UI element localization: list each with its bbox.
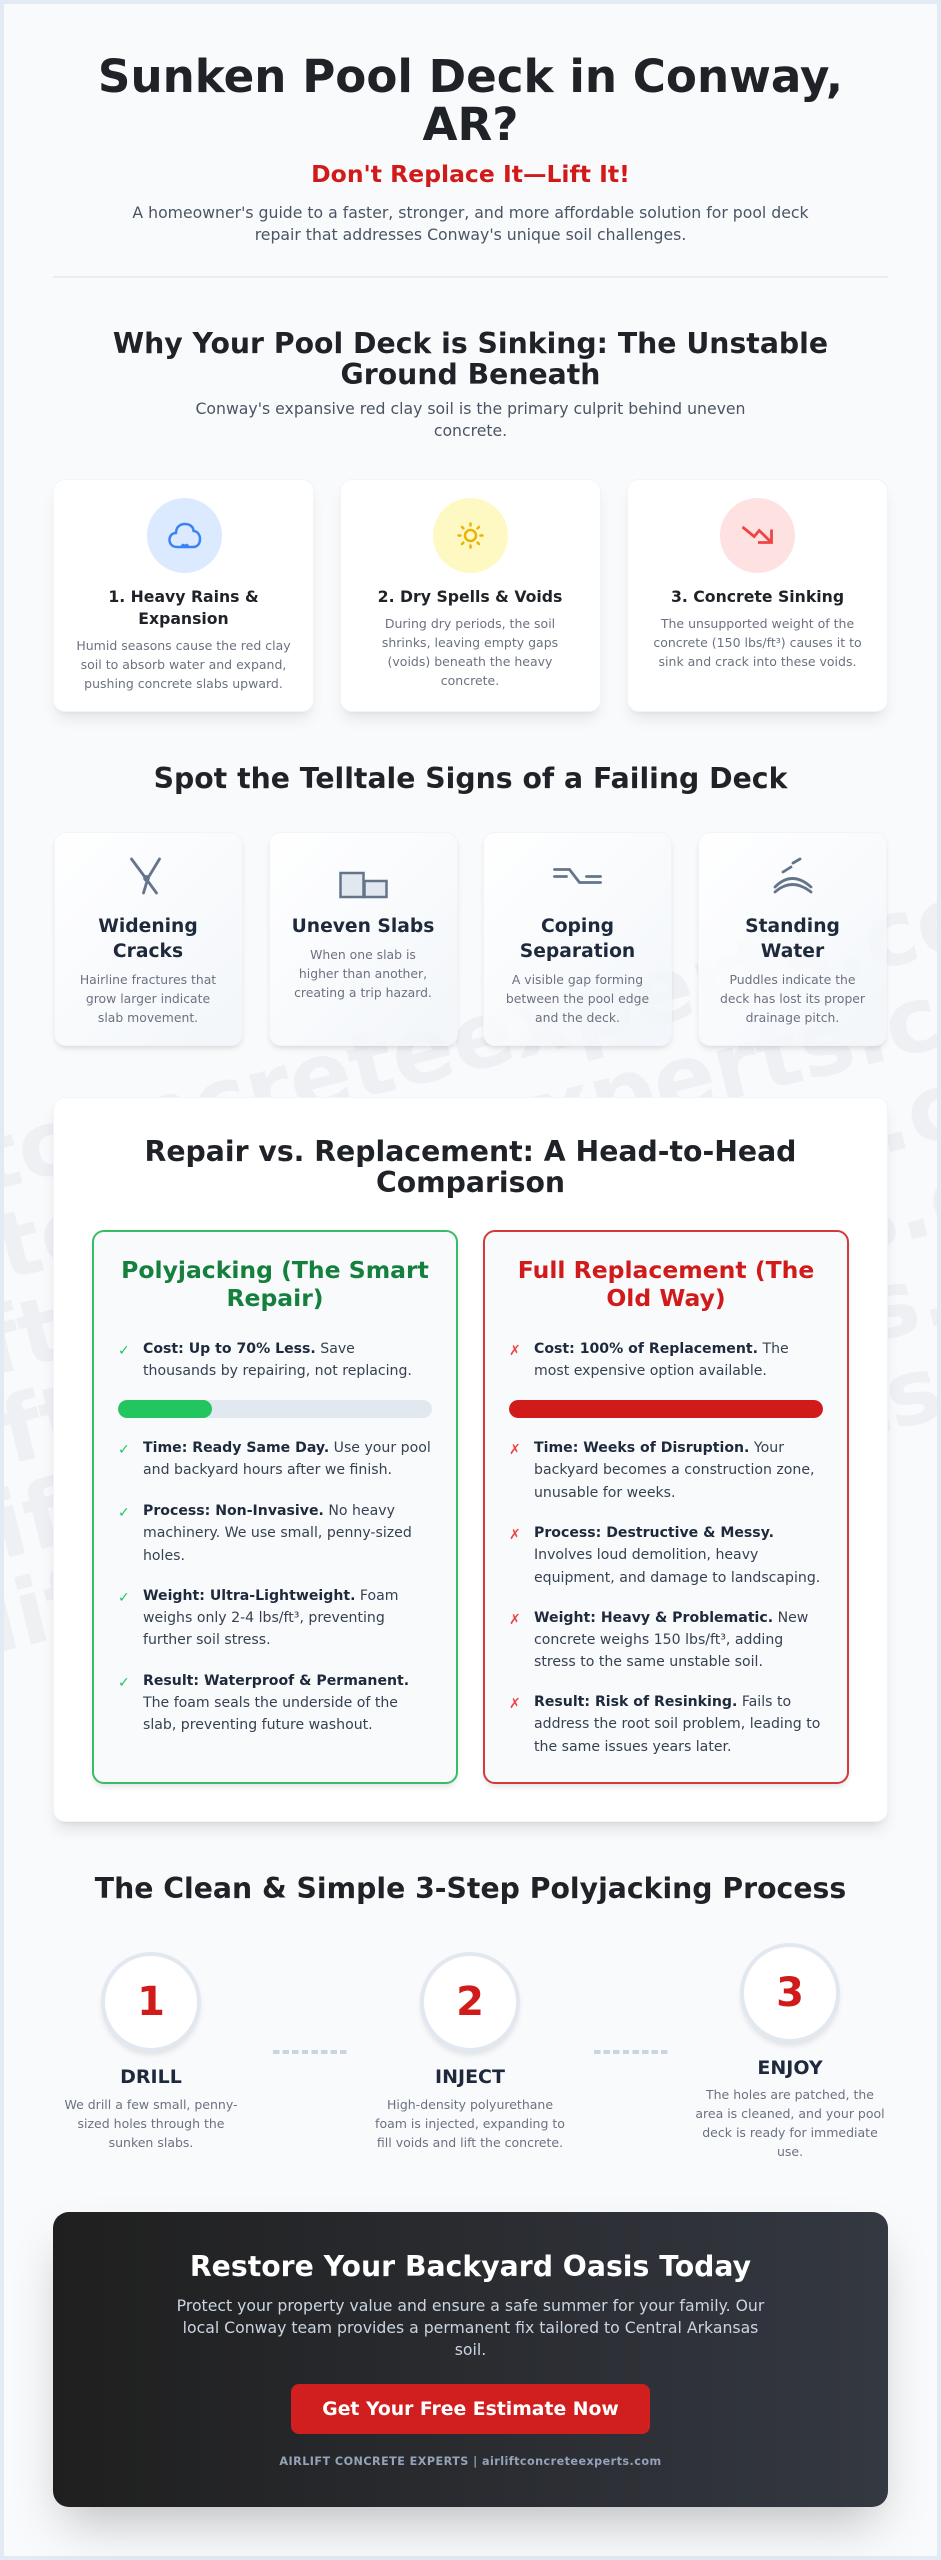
step 2: inject	[373, 1940, 569, 2165]
item text: concrete weighs 150 lbs/ft³, adding	[534, 1632, 783, 1648]
section intro: concrete.	[434, 421, 507, 440]
cross mark: ✗	[509, 1696, 521, 1712]
item text	[143, 1440, 431, 1478]
cta text: local Conway team provides a permanent fix tailored to Central Arkansas	[183, 2318, 758, 2337]
card title: Coping	[541, 916, 614, 937]
card title	[98, 916, 198, 962]
card title	[520, 916, 635, 962]
item text	[534, 1338, 789, 1382]
icon: coping gap	[553, 868, 602, 884]
comparison heading: Repair vs. Replacement: A Head-to-Head	[145, 1135, 796, 1168]
item text: Weight: Heavy & Problematic. New	[534, 1610, 808, 1626]
item: weight	[118, 1588, 399, 1648]
step number: 3	[776, 1970, 804, 2016]
item text: address the root soil problem, leading to	[534, 1716, 820, 1732]
cross mark: ✗	[509, 1612, 521, 1628]
card text	[653, 616, 862, 669]
cta button	[291, 2384, 650, 2434]
comparison heading	[145, 1135, 796, 1199]
title: AR?	[422, 98, 518, 150]
card title: Cracks	[113, 941, 183, 962]
card text: drainage pitch.	[746, 1010, 839, 1025]
check mark: ✓	[118, 1674, 130, 1690]
step text	[373, 2095, 567, 2152]
card text: When one slab is	[310, 947, 416, 962]
card text: Humid seasons cause the red clay	[76, 638, 291, 653]
icon: water	[774, 858, 812, 894]
step text: sunken slabs.	[109, 2135, 193, 2150]
card text: sink and crack into these voids.	[659, 654, 856, 669]
column heading: Full Replacement (The	[518, 1256, 814, 1284]
item text: Process: Destructive & Messy.	[534, 1525, 774, 1541]
footer brand: AIRLIFT CONCRETE EXPERTS | airliftconcreteexperts.com	[279, 2455, 662, 2468]
item text	[142, 1672, 409, 1733]
cross mark: ✗	[509, 1442, 521, 1458]
panel: process steps	[53, 1940, 888, 2165]
card: dry spells	[340, 479, 600, 712]
card title: Expansion	[138, 609, 229, 628]
step number	[740, 1943, 840, 2043]
item text: backyard becomes a construction zone,	[534, 1462, 814, 1478]
card text: During dry periods, the soil	[385, 616, 555, 631]
cost bar	[118, 1400, 432, 1418]
card text: Hairline fractures that	[80, 972, 216, 987]
item text: Result: Waterproof & Permanent.	[143, 1672, 409, 1688]
card title	[108, 587, 259, 628]
cost bar	[509, 1400, 823, 1418]
arrow: dashed connector 1	[273, 2050, 350, 2054]
card text: shrinks, leaving empty gaps	[382, 635, 558, 650]
cross mark: ✗	[509, 1342, 521, 1358]
title: Sunken Pool Deck in Conway,	[98, 50, 843, 103]
comparison heading: Comparison	[376, 1166, 565, 1199]
card text: grow larger indicate	[86, 991, 210, 1006]
intro text: repair that addresses Conway's unique soil challenges.	[255, 224, 686, 244]
column: full replacement	[483, 1230, 849, 1784]
card text: between the pool edge	[506, 991, 649, 1006]
item: time	[485, 1437, 846, 1505]
step number	[420, 1952, 520, 2052]
card title: Water	[761, 941, 824, 962]
item text: Weight: Ultra-Lightweight. Foam	[143, 1588, 399, 1604]
arrow: dashed connector 2	[594, 2050, 671, 2054]
column heading	[121, 1256, 429, 1312]
intro text	[132, 202, 809, 244]
step text: We drill a few small, penny-	[64, 2097, 238, 2112]
card: coping separation	[483, 832, 672, 1046]
card title: Widening	[98, 916, 198, 937]
step text: area is cleaned, and your pool	[695, 2106, 885, 2121]
card: concrete sinking	[627, 479, 888, 712]
column heading	[518, 1256, 814, 1312]
item text	[534, 1606, 808, 1673]
step 1: drill	[53, 1940, 249, 2165]
card text: creating a trip hazard.	[294, 985, 432, 1000]
section intro: Conway's expansive red clay soil is the primary culprit behind uneven	[195, 399, 746, 418]
card text: Puddles indicate the	[729, 972, 856, 987]
icon: sun	[433, 498, 508, 573]
step text	[53, 2095, 249, 2152]
heading: telltale signs: Spot the Telltale Signs of a Failing Deck	[154, 762, 787, 795]
item: result	[118, 1672, 409, 1733]
step text: use.	[777, 2144, 803, 2159]
card title: 1. Heavy Rains &	[108, 587, 259, 606]
cross mark: ✗	[509, 1527, 521, 1543]
header divider	[53, 276, 888, 278]
item text: equipment, and damage to landscaping.	[534, 1570, 820, 1586]
item text: Involves loud demolition, heavy	[534, 1547, 758, 1563]
step number	[101, 1952, 201, 2052]
card text: pushing concrete slabs upward.	[84, 676, 283, 691]
item: result	[485, 1691, 846, 1759]
item text: most expensive option available.	[534, 1363, 767, 1379]
card: heavy rains	[53, 479, 314, 712]
item text: slab, preventing future washout.	[143, 1717, 373, 1733]
card title	[745, 916, 840, 962]
item text: holes.	[143, 1548, 185, 1564]
heading text: Ground Beneath	[341, 358, 600, 391]
item: cost	[118, 1340, 412, 1379]
card title: Separation	[520, 941, 635, 962]
icon: cloud	[147, 498, 222, 573]
item text	[534, 1437, 814, 1504]
step text: The holes are patched, the	[706, 2087, 874, 2102]
step text: deck is ready for immediate	[702, 2125, 878, 2140]
section intro	[195, 399, 746, 440]
item text: and backyard hours after we finish.	[143, 1462, 392, 1478]
item text: further soil stress.	[143, 1632, 271, 1648]
step text	[693, 2085, 887, 2161]
column: polyjacking	[92, 1230, 458, 1784]
step text: foam is injected, expanding to	[375, 2116, 565, 2131]
item: weight	[485, 1606, 846, 1674]
item text: stress to the same unstable soil.	[534, 1654, 763, 1670]
item text	[143, 1340, 412, 1379]
step number: 2	[456, 1979, 484, 2025]
card text: and the deck.	[535, 1010, 620, 1025]
card text: The unsupported weight of the	[661, 616, 854, 631]
item text: Cost: Up to 70% Less. Save	[143, 1340, 355, 1356]
item text: unusable for weeks.	[534, 1485, 676, 1501]
heading text	[113, 327, 828, 391]
step text: sized holes through the	[78, 2116, 224, 2131]
heading: process: The Clean & Simple 3-Step Polyjacking Process	[95, 1872, 846, 1905]
cta text: soil.	[455, 2340, 486, 2359]
item text: weighs only 2-4 lbs/ft³, preventing	[143, 1610, 385, 1626]
panel: causes	[54, 498, 888, 720]
item text: thousands by repairing, not replacing.	[143, 1363, 412, 1379]
column heading: Polyjacking (The Smart	[121, 1256, 429, 1284]
step text: fill voids and lift the concrete.	[377, 2135, 563, 2150]
item: cost	[509, 1340, 789, 1379]
item text: The foam seals the underside of the	[143, 1695, 398, 1711]
item text	[143, 1503, 412, 1564]
card text: soil to absorb water and expand,	[81, 657, 286, 672]
item text	[534, 1522, 820, 1589]
panel: call to action	[53, 2212, 888, 2507]
card title: 3. Concrete Sinking	[671, 587, 844, 606]
card title: Uneven Slabs	[292, 916, 434, 937]
item text: Time: Ready Same Day. Use your pool	[143, 1440, 431, 1456]
step label: INJECT	[435, 2066, 505, 2088]
panel: comparison	[53, 1097, 888, 1822]
item: time	[118, 1440, 431, 1478]
card: widening cracks	[54, 832, 242, 1046]
header	[98, 50, 843, 244]
cta text: Protect your property value and ensure a safe summer for your family. Our	[177, 2296, 764, 2314]
card text: (voids) beneath the heavy	[388, 654, 552, 669]
cta button: Get Your Free Estimate Now	[322, 2399, 619, 2420]
item text: the same issues years later.	[534, 1739, 732, 1755]
step number: 1	[137, 1979, 165, 2025]
card text	[720, 972, 865, 1025]
card: standing water	[698, 832, 887, 1046]
icon: cracks	[130, 858, 161, 894]
title	[98, 50, 843, 150]
card text	[76, 638, 291, 691]
subtitle: Don't Replace It—Lift It!	[311, 160, 630, 188]
item text: Cost: 100% of Replacement. The	[534, 1340, 789, 1356]
column heading: Old Way)	[606, 1284, 726, 1312]
card text	[294, 947, 432, 1000]
card title: 2. Dry Spells & Voids	[378, 587, 562, 606]
panel: signs	[54, 847, 888, 1050]
check mark: ✓	[118, 1505, 130, 1521]
icon: downward trend arrow	[720, 498, 795, 573]
card text	[382, 616, 558, 688]
card text	[80, 972, 216, 1025]
intro text: A homeowner's guide to a faster, stronger, and more affordable solution for pool deck	[132, 202, 809, 222]
heading text: Why Your Pool Deck is Sinking: The Unstable	[113, 327, 828, 360]
step label: DRILL	[120, 2066, 182, 2088]
card title: Standing	[745, 916, 840, 937]
step label: ENJOY	[757, 2057, 823, 2079]
step text: High-density polyurethane	[387, 2097, 553, 2112]
item text: Process: Non-Invasive. No heavy	[143, 1503, 395, 1519]
item text: machinery. We use small, penny-sized	[143, 1525, 412, 1541]
item text: Time: Weeks of Disruption. Your	[534, 1440, 784, 1456]
card text: slab movement.	[98, 1010, 198, 1025]
card text	[506, 972, 649, 1025]
card: uneven slabs	[268, 832, 458, 1046]
check mark: ✓	[118, 1590, 130, 1606]
section heading: why sinking	[113, 327, 828, 440]
cta heading: Restore Your Backyard Oasis Today	[190, 2250, 751, 2283]
item text	[143, 1588, 399, 1648]
check mark: ✓	[118, 1442, 130, 1458]
item text: Result: Risk of Resinking. Fails to	[534, 1694, 791, 1710]
card text: A visible gap forming	[512, 972, 643, 987]
cta text	[53, 2294, 888, 2362]
step 3: enjoy	[693, 1940, 889, 2165]
check mark: ✓	[118, 1342, 130, 1358]
item: process	[485, 1522, 846, 1590]
item: process	[118, 1503, 412, 1564]
card text: higher than another,	[299, 966, 427, 981]
card text: concrete (150 lbs/ft³) causes it to	[653, 635, 862, 650]
icon: slabs	[339, 872, 388, 898]
item text	[534, 1691, 820, 1758]
card text: concrete.	[441, 673, 499, 688]
card text: deck has lost its proper	[720, 991, 865, 1006]
column heading: Repair)	[226, 1284, 324, 1312]
